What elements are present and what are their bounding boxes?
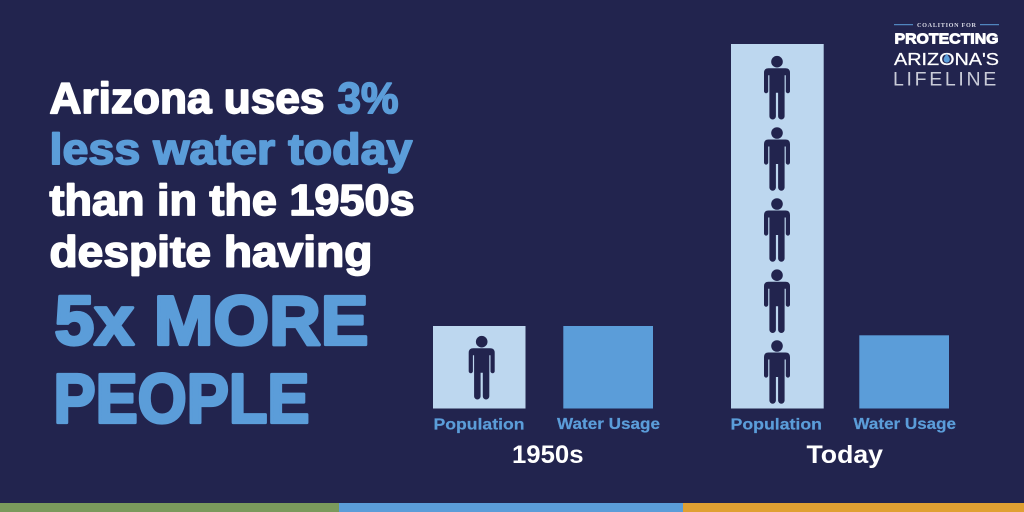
chart group: today [730,44,956,469]
headline text: less water today [50,125,413,174]
water usage bar 1950s [563,326,653,408]
icon: person [469,336,495,399]
logo: coalition for protecting arizona's lifeline [893,22,999,91]
label: water usage: Water Usage [854,416,956,433]
headline text: Arizona uses [50,74,324,123]
logo: coalition for protecting arizona's lifeline: ARIZONA'S [894,49,999,69]
logo: coalition for protecting arizona's lifeline: COALITION FOR [917,22,977,29]
callout: 5x more people: PEOPLE [54,360,310,438]
label: population: Population [730,416,822,434]
headline text: 3% [338,74,398,123]
logo: coalition for protecting arizona's lifeline: PROTECTING [894,30,998,48]
water usage bar today [859,335,949,408]
icons: five people [764,56,790,404]
callout: 5x more people [54,281,368,438]
logo: coalition for protecting arizona's lifeline: LIFELINE [893,70,999,91]
label: 1950s: 1950s [512,441,584,469]
headline text: despite having [50,228,372,277]
chart group: 1950s [433,326,660,469]
label: today: Today [806,441,883,469]
population bar 1950s [433,326,526,408]
population bar today [731,44,824,408]
bottom color strip [0,503,1024,512]
headline text: than in the 1950s [50,176,414,225]
callout: 5x more people: 5x MORE [54,281,368,359]
label: population: Population [434,416,524,434]
label: water usage: Water Usage [557,416,660,433]
headline text [50,74,414,277]
